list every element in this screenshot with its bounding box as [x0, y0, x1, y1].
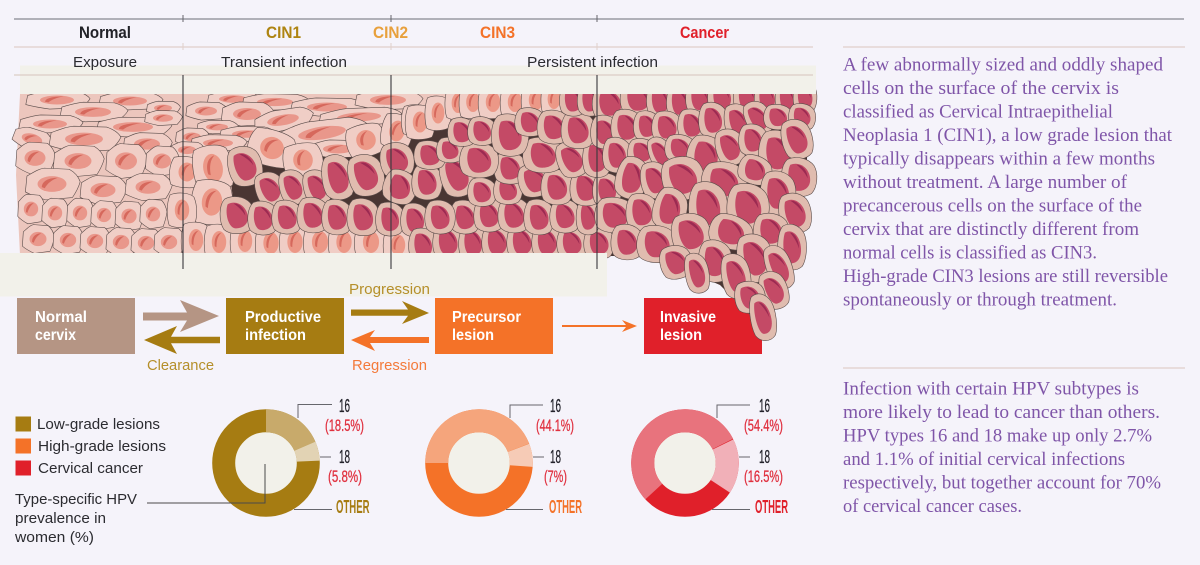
bottom band — [0, 253, 607, 296]
arrow: clearance — [144, 326, 220, 354]
text block: HPV subtypes — [843, 368, 1185, 517]
box: productive infection: Productive — [245, 309, 321, 326]
text block: CIN description: without treatment. A large number of — [843, 173, 1128, 193]
donut: low-grade lesions: OTHER — [336, 497, 370, 517]
donut: cervical cancer: (16.5%) — [744, 467, 783, 486]
donut: low-grade lesions — [147, 396, 370, 519]
text block: HPV subtypes: and 1.1% of initial cervical infections — [843, 450, 1125, 470]
donut: low-grade lesions: 16 — [339, 396, 350, 416]
box: productive infection — [226, 298, 344, 354]
text block: CIN description: cervix that are distinctly different from — [843, 220, 1140, 240]
arrow: regression — [351, 330, 429, 351]
donut: high-grade lesions: 16 — [550, 396, 561, 416]
box: invasive lesion: lesion — [660, 327, 702, 344]
stage header rules — [14, 15, 1184, 75]
legend: High-grade lesions — [38, 438, 166, 455]
box: normal cervix: Normal — [35, 309, 87, 326]
text block: HPV subtypes: Infection with certain HPV subtypes is — [843, 380, 1139, 400]
donut: high-grade lesions: OTHER — [549, 497, 582, 517]
donut caption: women (%) — [14, 529, 94, 546]
legend: Low-grade lesions — [37, 416, 160, 433]
infection stage labels — [73, 54, 658, 71]
box: normal cervix — [17, 298, 135, 354]
box: invasive lesion — [644, 298, 762, 354]
infection stage labels: Exposure — [73, 54, 137, 71]
top band — [20, 66, 816, 94]
donut: high-grade lesions — [424, 396, 582, 518]
text block: HPV subtypes: of cervical cancer cases. — [843, 497, 1022, 517]
donut: low-grade lesions: (5.8%) — [328, 467, 362, 486]
box: precursor lesion: lesion — [452, 327, 494, 344]
donut: cervical cancer: OTHER — [755, 497, 788, 517]
infection stage labels: Transient infection — [221, 54, 347, 71]
arrow: normal to productive — [143, 300, 219, 332]
text block: HPV subtypes: more likely to lead to cancer than others. — [843, 403, 1160, 423]
arrow labels: Clearance — [147, 357, 214, 374]
text block: CIN description: precancerous cells on the surface of the — [843, 196, 1142, 216]
text block: CIN description: normal cells is classified as CIN3. — [843, 244, 1097, 264]
donut: high-grade lesions: 18 — [550, 447, 561, 467]
abnormal cells — [219, 80, 817, 343]
arrow labels: Progression — [349, 281, 430, 298]
text block: CIN description: typically disappears within a few months — [843, 150, 1155, 170]
arrow: precursor to invasive — [562, 320, 637, 332]
stage headings: Normal — [79, 24, 131, 42]
text block: CIN description: classified as Cervical Intraepithelial — [843, 102, 1113, 122]
text block: CIN description: Neoplasia 1 (CIN1), a low grade lesion that — [843, 126, 1173, 146]
normal cells — [11, 83, 567, 263]
arrow: progression — [351, 301, 429, 324]
donut: high-grade lesions: (44.1%) — [536, 416, 574, 435]
box: normal cervix: cervix — [35, 327, 76, 344]
text block: CIN description: cells on the surface of the cervix is — [843, 79, 1119, 99]
donut: cervical cancer — [625, 396, 788, 523]
donut: cervical cancer: (54.4%) — [744, 416, 783, 435]
box: productive infection: infection — [245, 327, 306, 344]
donut: low-grade lesions: (18.5%) — [325, 416, 364, 435]
text block: CIN description: High-grade CIN3 lesions are still reversible — [843, 267, 1168, 287]
box: invasive lesion: Invasive — [660, 309, 716, 326]
donut caption — [14, 491, 137, 546]
donut: low-grade lesions: 18 — [339, 447, 350, 467]
donut: cervical cancer: 18 — [759, 447, 770, 467]
box: precursor lesion: Precursor — [452, 309, 521, 326]
donut: high-grade lesions: (7%) — [544, 467, 567, 486]
stage headings — [79, 24, 730, 42]
stage headings: CIN2 — [373, 24, 408, 42]
donut caption: Type-specific HPV — [15, 491, 137, 508]
text block: CIN description — [843, 47, 1185, 310]
text block: CIN description: A few abnormally sized and oddly shaped — [843, 56, 1164, 76]
box: precursor lesion — [435, 298, 553, 354]
legend: Cervical cancer — [38, 460, 143, 477]
stage headings: Cancer — [680, 24, 730, 42]
text block: HPV subtypes: HPV types 16 and 18 make up only 2.7% — [843, 426, 1152, 446]
arrow labels — [147, 281, 430, 374]
stage divider lines — [183, 75, 597, 269]
stage headings: CIN3 — [480, 24, 515, 42]
infection stage labels: Persistent infection — [527, 54, 658, 71]
donut: cervical cancer: 16 — [759, 396, 770, 416]
text block: HPV subtypes: respectively, but together account for 70% — [843, 474, 1161, 494]
text block: CIN description: spontaneously or through treatment. — [843, 290, 1117, 310]
donut caption: prevalence in — [15, 510, 106, 527]
stage headings: CIN1 — [266, 24, 301, 42]
legend — [16, 416, 166, 477]
tissue illustration: cells — [11, 80, 817, 343]
arrow labels: Regression — [352, 357, 427, 374]
